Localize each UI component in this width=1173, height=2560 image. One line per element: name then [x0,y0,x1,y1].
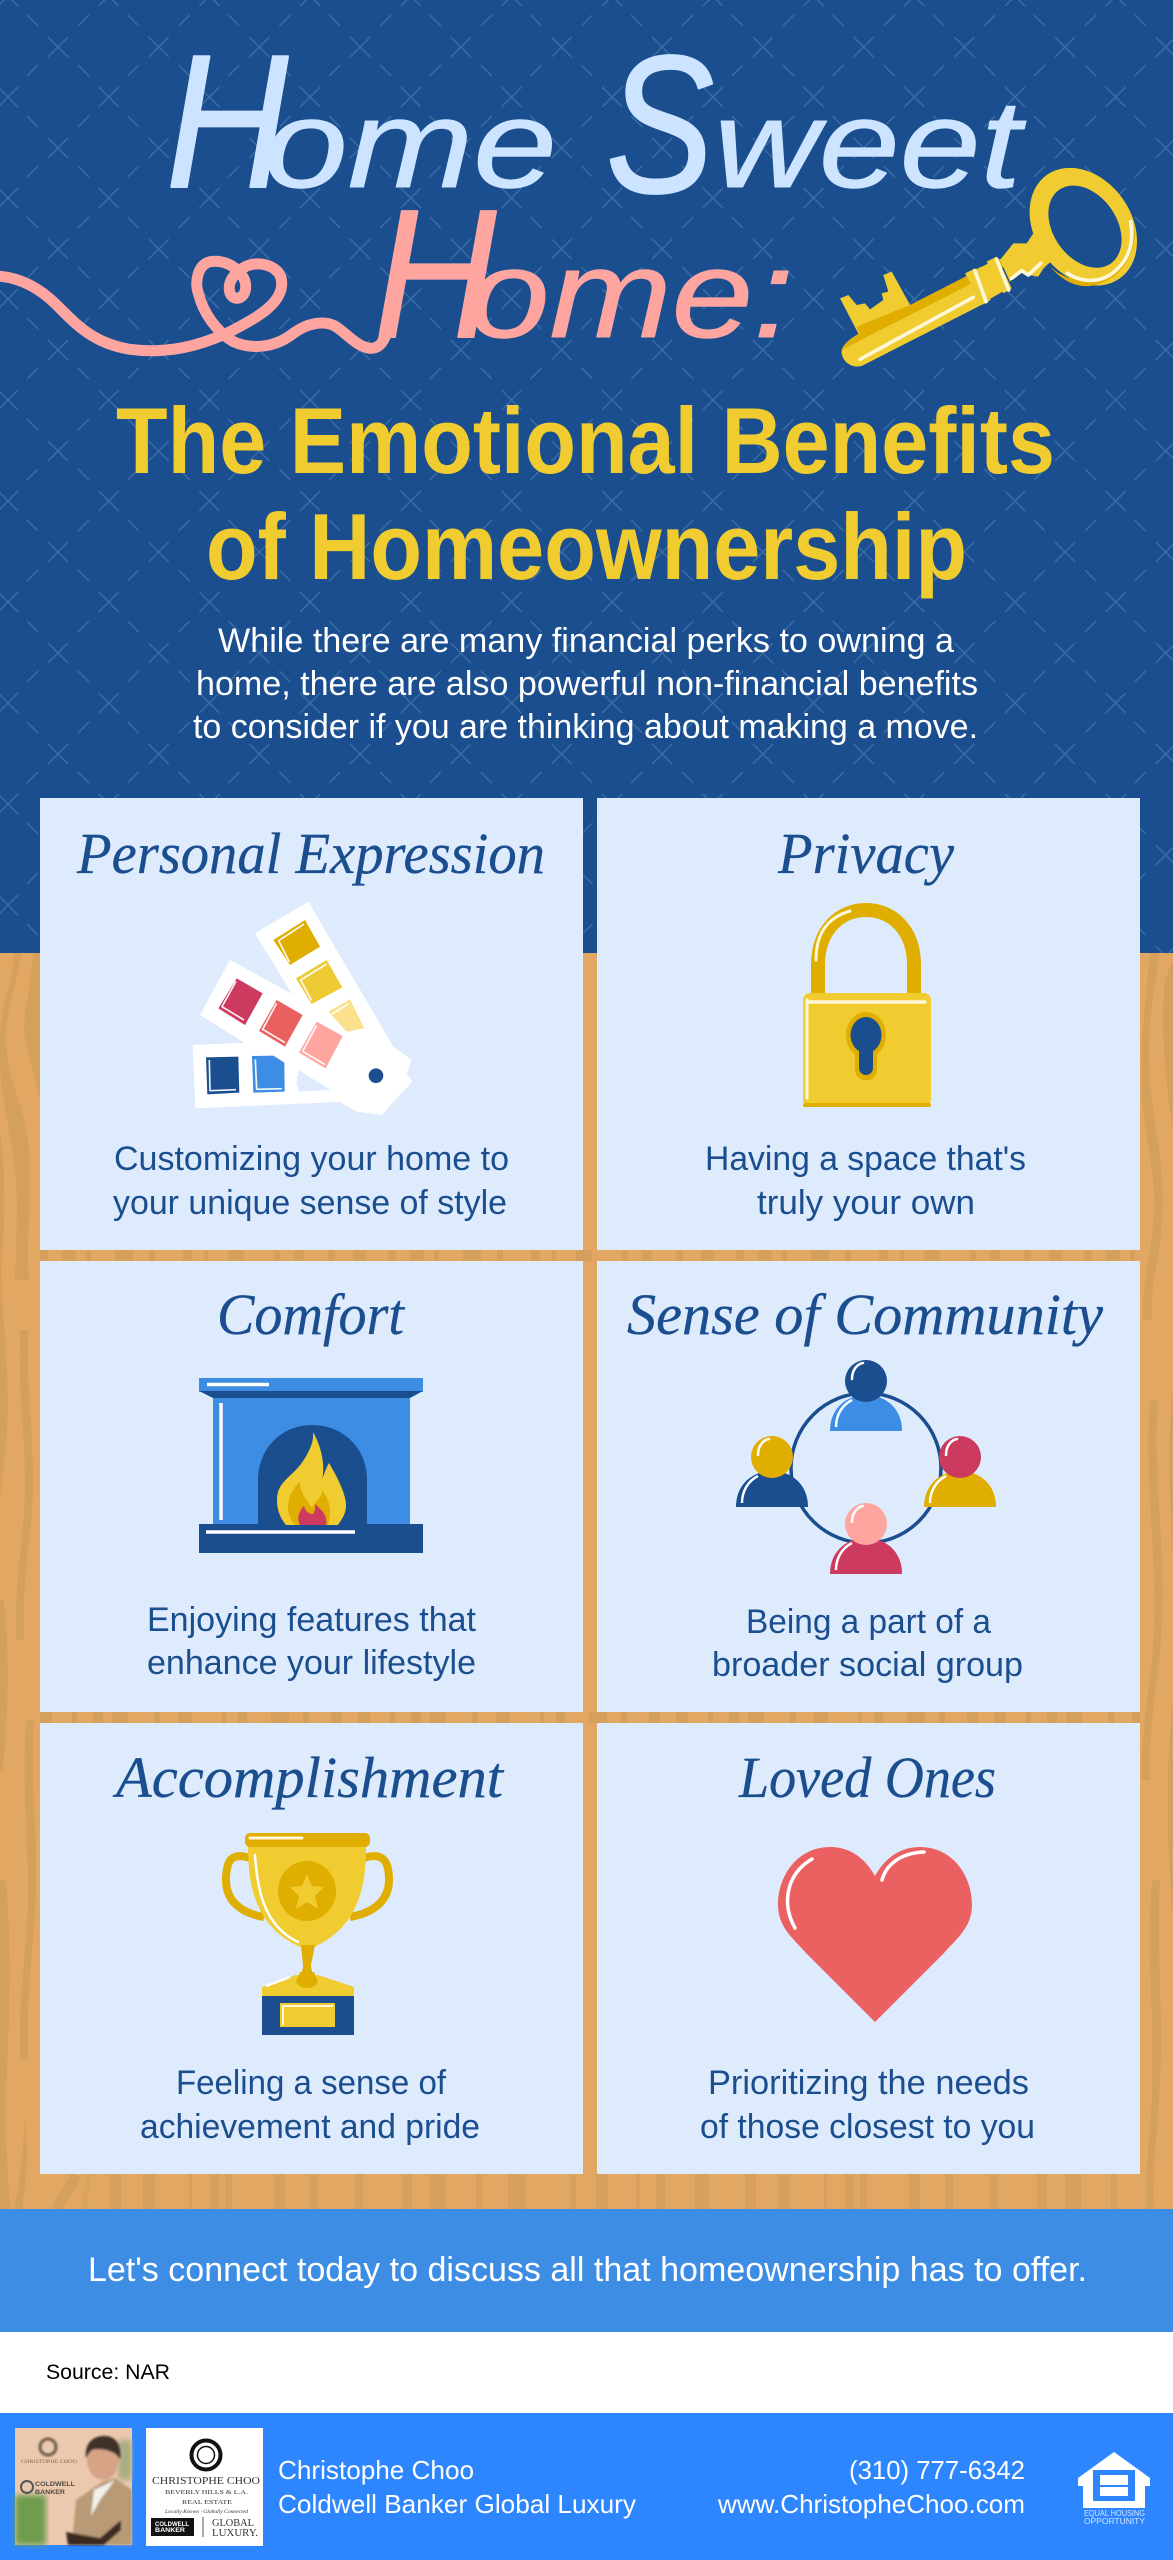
text: Personal Expression description: your unique sense of style [113,1184,507,1222]
agent logo: LUXURY. [212,2528,258,2539]
source note [0,2332,1173,2413]
agent logo [146,2428,263,2546]
icon: equal housing opportunity: EQUAL HOUSING [1084,2509,1145,2518]
text: Comfort description: enhance your lifestyle [147,1644,476,1682]
agent photo: COLDWELL [35,2481,75,2488]
agent photo: CHRISTOPHE CHOO [21,2459,77,2465]
text: Comfort description: Enjoying features that [147,1601,477,1639]
agent logo: BEVERLY HILLS & L.A. [165,2489,248,2496]
agent phone and website: www.ChristopheChoo.com [717,2489,1025,2519]
subtitle: The Emotional Benefits of Homeownership: of Homeownership [206,494,967,599]
title: Home Sweet: ome [264,75,557,214]
heading: Accomplishment: Accomplishment [112,1745,505,1810]
title: Home Sweet: weet [714,75,1027,214]
agent phone and website: (310) 777-6342 [849,2455,1025,2485]
text: Sense of Community description [712,1603,1023,1684]
text: Privacy description [705,1140,1026,1222]
agent photo [15,2428,132,2545]
agent logo: CHRISTOPHE CHOO [152,2475,260,2487]
source note: Source: NAR [46,2361,170,2384]
heading: Sense of Community: Sense of Community [627,1282,1103,1347]
text: Accomplishment description: achievement and pride [140,2108,480,2146]
icon: colour swatch fan [193,902,412,1115]
text: Accomplishment description: Feeling a sense of [176,2064,447,2102]
subtitle: The Emotional Benefits of Homeownership [116,388,1055,599]
icon: trophy [226,1833,389,2035]
call to action band [0,2209,1173,2332]
text: Loved Ones description [700,2064,1035,2146]
title: Home Sweet: H [166,16,289,228]
agent logo: GLOBAL [212,2518,254,2529]
text: Loved Ones description: Prioritizing the needs [708,2064,1029,2102]
heading: Privacy: Privacy [777,821,954,886]
panel: Privacy [597,798,1140,1250]
panel: Sense of Community [597,1261,1140,1712]
call to action band: Let's connect today to discuss all that homeownership has to offer. [88,2251,1087,2289]
agent name and company: Coldwell Banker Global Luxury [278,2489,636,2519]
person: top [830,1360,902,1431]
background: wood planks [0,953,1173,2209]
title: Home Sweet [166,15,1027,234]
background: navy patterned header [0,0,1173,954]
title: Home with heart flourish: H [374,171,497,376]
heading: Personal Expression: Personal Expression [76,821,545,886]
icon: fireplace [199,1378,423,1553]
footer bar [0,2413,1173,2560]
icon: equal housing opportunity [1078,2452,1150,2526]
agent logo: BANKER [155,2528,186,2534]
heading: Comfort: Comfort [217,1282,406,1347]
agent photo: BANKER [35,2489,65,2496]
panel: Comfort [40,1261,583,1712]
text: Personal Expression description: Customizing your home to [114,1140,509,1178]
heading: Loved Ones: Loved Ones [738,1745,996,1810]
title: Home with heart flourish: ome: [468,225,794,364]
icon: equal housing opportunity: OPPORTUNITY [1084,2517,1146,2526]
agent name and company [278,2455,636,2519]
panel: Loved Ones [597,1723,1140,2174]
text: Sense of Community description: Being a part of a [746,1603,991,1641]
intro paragraph: While there are many financial perks to owning a [218,622,954,660]
text: Loved Ones description: of those closest to you [700,2108,1035,2146]
person: left [736,1436,808,1507]
title: Home Sweet: S [606,15,714,234]
text: Comfort description [147,1601,477,1682]
text: Accomplishment description [140,2064,480,2146]
intro paragraph: home, there are also powerful non-financial benefits [196,665,978,703]
intro paragraph: to consider if you are thinking about making a move. [193,708,978,746]
text: Privacy description: Having a space that's [705,1140,1026,1178]
title: Home with heart flourish [0,171,794,376]
person: right [924,1436,996,1507]
panel: Personal Expression [40,798,583,1250]
agent phone and website [717,2455,1025,2519]
text: Privacy description: truly your own [757,1184,975,1222]
panel: Accomplishment [40,1723,583,2174]
agent logo: COLDWELL [155,2522,189,2528]
text: Sense of Community description: broader social group [712,1646,1023,1684]
person: bottom [830,1503,902,1574]
agent logo: REAL ESTATE [182,2500,232,2506]
intro paragraph [193,622,978,746]
agent logo: Locally Known · Globally Connected [164,2509,248,2515]
icon: community circle of people [736,1360,996,1574]
icon: heart [778,1847,972,2022]
text: Personal Expression description [113,1140,509,1222]
agent name and company: Christophe Choo [278,2455,474,2485]
subtitle: The Emotional Benefits of Homeownership: The Emotional Benefits [116,388,1055,493]
icon: golden key [840,147,1159,367]
icon: padlock [803,910,931,1107]
